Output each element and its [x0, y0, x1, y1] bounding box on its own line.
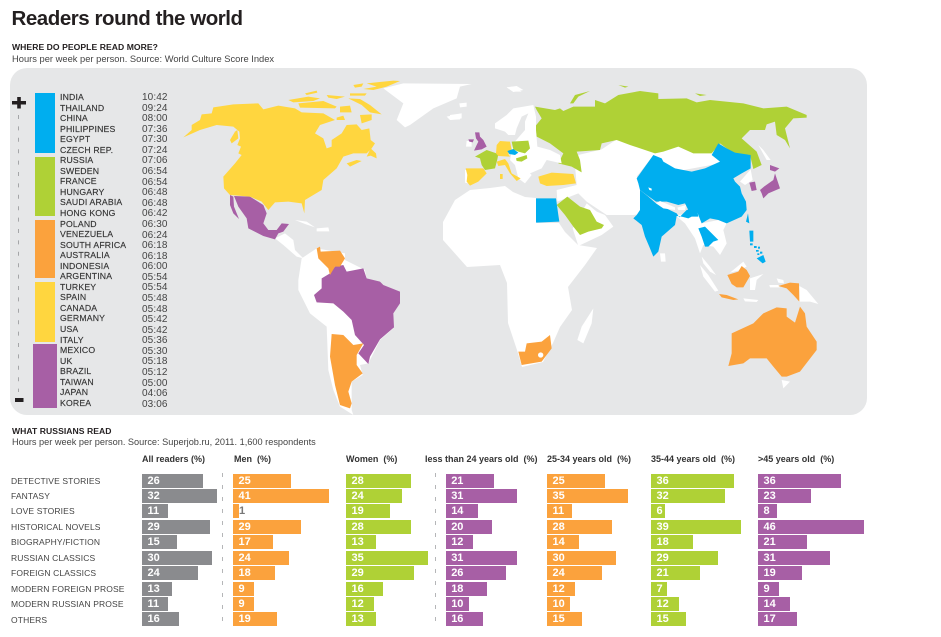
bar chart: women: 13 [352, 613, 364, 625]
Egypt [536, 198, 559, 223]
reading times: 06:00 [142, 261, 168, 272]
bar chart: 35-44: 39 [656, 521, 669, 533]
bar chart: all readers: 11 [148, 598, 159, 610]
legend: orange group [35, 220, 55, 278]
bar chart: men: 24 [238, 552, 251, 564]
Czech Republic [507, 149, 518, 155]
bar chart: men: 9 [238, 598, 245, 610]
legend scale: dashed axis [18, 115, 20, 392]
column heading: all readers: All readers (%) [142, 454, 205, 464]
reading times: 08:00 [142, 113, 168, 124]
legend: green group [35, 157, 55, 216]
country names: THAILAND [60, 103, 104, 113]
title: Readers round the world [12, 6, 243, 30]
bar chart: 25-34: 35 [552, 490, 565, 502]
reading times: 05:48 [142, 293, 168, 304]
bar chart: 25-34 [547, 474, 628, 626]
row labels: MODERN FOREIGN PROSE [11, 584, 125, 594]
Germany [496, 141, 512, 157]
bar chart: all readers [142, 474, 217, 626]
Argentina [330, 334, 363, 408]
bar chart: 25-34: 15 [552, 613, 565, 625]
South Africa [518, 335, 552, 365]
reading times: 06:18 [142, 251, 168, 262]
bar chart: 25-34: 12 [552, 583, 565, 595]
country names: VENEZUELA [60, 229, 113, 239]
reading times: 03:06 [142, 399, 168, 410]
bar chart: under 24: 31 [451, 490, 463, 502]
country names: KOREA [60, 398, 91, 408]
reading times: 06:54 [142, 177, 168, 188]
bar chart: men: 19 [238, 613, 251, 625]
country names: RUSSIA [60, 155, 93, 165]
map: East Asia [633, 143, 780, 257]
row labels [11, 476, 125, 625]
legend scale: plus sign [12, 97, 26, 108]
map: Greenland, Latin America [230, 83, 472, 415]
country names: POLAND [60, 219, 97, 229]
bar chart: men: 25 [238, 474, 251, 486]
South America base [298, 248, 400, 415]
row labels: BIOGRAPHY/FICTION [11, 537, 100, 547]
bar chart: over 45: 31 [764, 552, 776, 564]
reading times: 10:42 [142, 92, 168, 103]
bar chart: 35-44: 36 [656, 474, 669, 486]
bar chart: 35-44: 15 [656, 613, 669, 625]
bar chart: women: 28 [352, 474, 364, 486]
Taiwan [746, 213, 749, 223]
reading times: 07:36 [142, 124, 168, 135]
bar chart: all readers: 32 [148, 490, 160, 502]
country names: SPAIN [60, 292, 86, 302]
Hungary [516, 155, 527, 162]
country names: EGYPT [60, 134, 90, 144]
country names: ITALY [60, 335, 84, 345]
bar chart: under 24: 26 [451, 567, 463, 579]
country names [60, 92, 126, 408]
column heading: women: Women (%) [346, 454, 397, 464]
heading: what Russians read: WHAT RUSSIANS READ [12, 426, 112, 436]
Korea and Japan [749, 165, 780, 198]
map: southern hemisphere east [518, 307, 817, 377]
country names: SWEDEN [60, 166, 99, 176]
country names: AUSTRALIA [60, 250, 110, 260]
bar chart: women: 28 [352, 521, 364, 533]
Malay peninsula and Sumatra [700, 257, 818, 304]
reading times: 05:12 [142, 367, 168, 378]
China [637, 143, 751, 223]
bar chart: women: 24 [352, 490, 364, 502]
bar chart: men: 29 [238, 521, 251, 533]
row labels: HISTORICAL NOVELS [11, 522, 101, 532]
column heading: over 45: >45 years old (%) [758, 454, 834, 464]
bar chart: all readers: 16 [148, 613, 160, 625]
column heading: men: Men (%) [234, 454, 271, 464]
bar chart: under 24: 21 [451, 474, 463, 486]
bar chart: under 24: 14 [451, 505, 463, 517]
source note: chart: Hours per week per person. Source: Superjob.ru, 2011. 1,600 respondents [12, 437, 316, 447]
bar chart: over 45: 46 [764, 521, 776, 533]
bar chart: all readers: 26 [148, 474, 160, 486]
country names: SOUTH AFRICA [60, 240, 126, 250]
Russia [535, 85, 807, 172]
bar chart: men [233, 474, 329, 626]
bar chart: women: 16 [352, 583, 364, 595]
Spain [466, 168, 487, 186]
reading times: 06:30 [142, 219, 168, 230]
bar chart: over 45: 17 [764, 613, 776, 625]
country names: CANADA [60, 303, 97, 313]
bar chart: under 24: 18 [451, 583, 463, 595]
bar chart: men: 17 [238, 536, 251, 548]
reading times: 05:18 [142, 356, 168, 367]
legend: blue group [35, 93, 55, 152]
bar chart: all readers: 15 [148, 536, 160, 548]
reading times: 07:06 [142, 155, 168, 166]
bar chart: 35-44: 12 [656, 598, 669, 610]
reading times: 05:00 [142, 378, 168, 389]
legend: purple group [33, 344, 57, 408]
map: Canada and USA [183, 81, 400, 213]
bar chart: all readers: 30 [148, 552, 160, 564]
Venezuela [317, 247, 345, 275]
country names: CHINA [60, 113, 88, 123]
bar chart: women: 29 [352, 567, 364, 579]
Philippines [749, 231, 766, 263]
bar chart: all readers: 13 [148, 583, 160, 595]
reading times: 05:54 [142, 272, 168, 283]
reading times: 05:42 [142, 325, 168, 336]
bar chart: over 45 [758, 474, 864, 626]
bar chart: over 45: 8 [764, 505, 770, 517]
legend: yellow group [35, 282, 55, 342]
reading times: 06:24 [142, 230, 168, 241]
country names: CZECH REP. [60, 145, 113, 155]
France [475, 150, 498, 170]
reading times: 04:06 [142, 388, 168, 399]
map: South-East Asia islands [700, 231, 818, 304]
bar chart: over 45: 21 [764, 536, 776, 548]
legend scale: minus sign [15, 398, 24, 402]
bar chart: under 24: 20 [451, 521, 463, 533]
reading times: 05:30 [142, 346, 168, 357]
Central America and Caribbean [275, 220, 329, 258]
map: Asia base land [507, 86, 790, 388]
reading times: 05:54 [142, 282, 168, 293]
bar chart: 25-34: 14 [552, 536, 565, 548]
bar chart: over 45: 19 [764, 567, 776, 579]
India [633, 190, 698, 257]
country names: UK [60, 356, 72, 366]
bar chart: women: 19 [352, 505, 364, 517]
Australia [728, 307, 817, 377]
bar chart: under 24 [446, 474, 517, 626]
bar chart: under 24: 31 [451, 552, 463, 564]
Brazil [314, 265, 400, 364]
reading times: 06:48 [142, 187, 168, 198]
UK [468, 132, 487, 151]
bar chart: men: 18 [238, 567, 251, 579]
bar chart: women: 12 [352, 598, 364, 610]
bar chart: under 24: 12 [451, 536, 463, 548]
source note: map: Hours per week per person. Source: World Culture Score Index [12, 54, 274, 64]
row labels: DETECTIVE STORIES [11, 476, 100, 486]
map: Middle East [536, 173, 604, 235]
bar chart: 25-34: 24 [552, 567, 565, 579]
country names: MEXICO [60, 345, 95, 355]
reading times [142, 92, 168, 410]
Poland [512, 141, 530, 153]
bar chart: all readers: 24 [148, 567, 160, 579]
country names: USA [60, 324, 78, 334]
bar chart: 35-44: 6 [656, 505, 663, 517]
Greenland and Iceland [383, 83, 472, 127]
country names: TAIWAN [60, 377, 94, 387]
map: Mongolia and Indochina base [650, 143, 753, 255]
row labels: MODERN RUSSIAN PROSE [11, 599, 124, 609]
row labels: RUSSIAN CLASSICS [11, 553, 95, 563]
country names: FRANCE [60, 176, 97, 186]
row labels: OTHERS [11, 615, 47, 625]
reading times: 05:42 [142, 314, 168, 325]
row labels: LOVE STORIES [11, 506, 75, 516]
country names: INDIA [60, 92, 84, 102]
reading times: 09:24 [142, 103, 168, 114]
bar chart: 25-34: 30 [552, 552, 565, 564]
bar chart: 25-34: 10 [552, 598, 565, 610]
bar chart: all readers: 11 [148, 505, 159, 517]
reading times: 06:48 [142, 198, 168, 209]
column heading: 35-44: 35-44 years old (%) [651, 454, 735, 464]
reading times: 07:24 [142, 145, 168, 156]
country names: GERMANY [60, 313, 105, 323]
row labels: FANTASY [11, 491, 50, 501]
bar chart: over 45: 9 [764, 583, 770, 595]
bar chart: 25-34: 28 [552, 521, 565, 533]
bar chart: men: 41 [238, 490, 251, 502]
Saudi Arabia [557, 197, 604, 235]
bar chart: 35-44: 21 [656, 567, 669, 579]
bar chart: women: 35 [352, 552, 364, 564]
reading times: 06:54 [142, 166, 168, 177]
bar chart: women [346, 474, 428, 626]
country names: INDONESIA [60, 261, 109, 271]
bar chart: over 45: 36 [764, 474, 776, 486]
bar chart: under 24: 10 [451, 598, 463, 610]
bar chart: men: 1 [239, 505, 245, 517]
bar chart: 35-44: 18 [656, 536, 669, 548]
row labels: FOREIGN CLASSICS [11, 568, 96, 578]
country names: BRAZIL [60, 366, 91, 376]
panel: world map [10, 68, 867, 414]
country names: ARGENTINA [60, 271, 112, 281]
bar chart: 35-44: 29 [656, 552, 669, 564]
bar chart: over 45: 23 [764, 490, 776, 502]
bar chart: 35-44: 7 [656, 583, 663, 595]
Thailand [698, 227, 718, 247]
Europe base land [450, 87, 562, 183]
bar chart: over 45: 14 [764, 598, 776, 610]
bar chart: 35-44: 32 [656, 490, 669, 502]
column heading: 25-34: 25-34 years old (%) [547, 454, 631, 464]
Turkey [538, 173, 576, 186]
reading times: 06:42 [142, 208, 168, 219]
country names: HUNGARY [60, 187, 104, 197]
country names: SAUDI ARABIA [60, 197, 122, 207]
bar chart: all readers: 29 [148, 521, 160, 533]
bar chart: men: 9 [238, 583, 245, 595]
Italy [497, 159, 521, 181]
map: Europe [450, 87, 562, 186]
bar chart: 35-44 [651, 474, 741, 626]
Mexico [230, 195, 289, 239]
Indonesia [719, 266, 799, 302]
country names: PHILIPPINES [60, 124, 115, 134]
column heading: under 24: less than 24 years old (%) [425, 454, 538, 464]
heading: where do people read more: WHERE DO PEOPLE READ MORE? [12, 42, 158, 52]
bar chart: 25-34: 25 [552, 474, 565, 486]
map: Africa base [443, 186, 597, 367]
reading times: 05:36 [142, 335, 168, 346]
reading times: 05:48 [142, 304, 168, 315]
reading times: 07:30 [142, 134, 168, 145]
bar chart: women: 13 [352, 536, 364, 548]
reading times: 06:18 [142, 240, 168, 251]
Nepal and Bhutan [648, 187, 686, 210]
country names: JAPAN [60, 387, 88, 397]
bar chart: 25-34: 11 [552, 505, 564, 517]
bar chart: under 24: 16 [451, 613, 463, 625]
country names: HONG KONG [60, 208, 116, 218]
country names: TURKEY [60, 282, 96, 292]
